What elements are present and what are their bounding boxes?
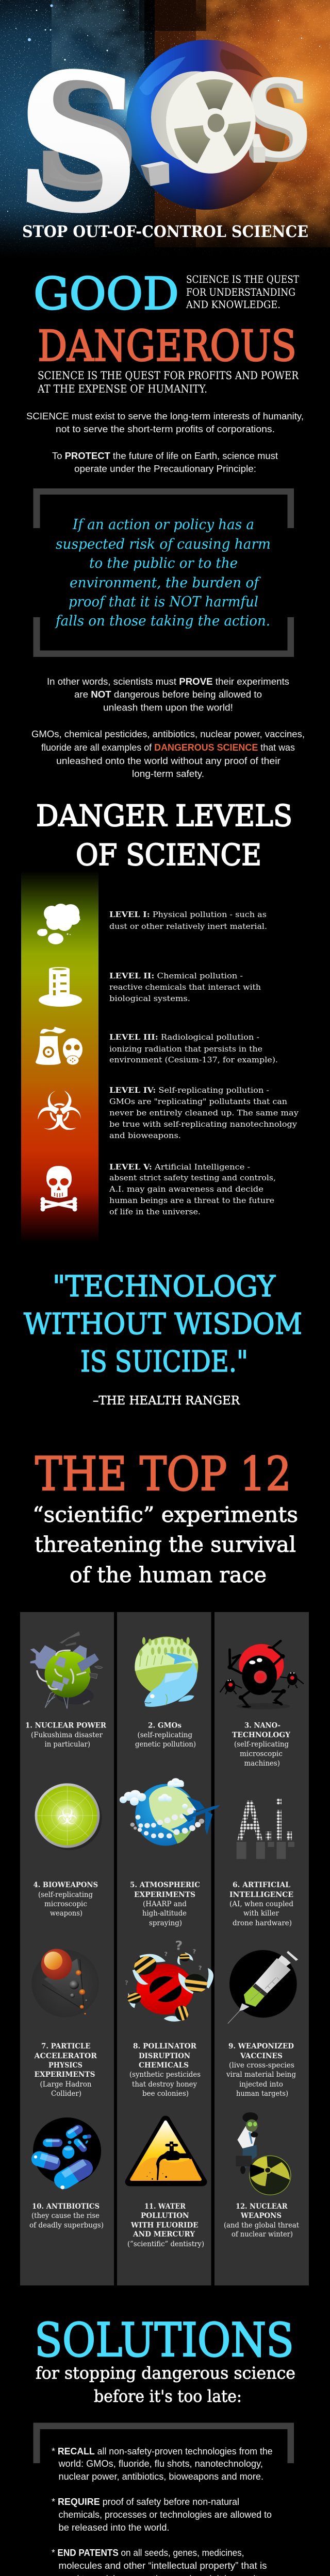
text: item 5 atmospheric experiments: 5. ATMOSPHERIC (130, 1881, 200, 1889)
text: item 4 bioweapons: 4. BIOWEAPONS (33, 1881, 98, 1889)
text: item 11 water pollution: POLLUTION (141, 2212, 189, 2220)
text: good science definition: AND KNOWLEDGE. (186, 298, 280, 311)
icon: level 5 skull and crossbones (40, 1166, 77, 1212)
text: item 7 particle accelerator (34, 2042, 97, 2098)
text: item 5 atmospheric experiments (130, 1881, 200, 1927)
text: item 1 nuclear power: (Fukushima disaster (31, 1731, 103, 1739)
text: item 2 GMOs (135, 1722, 196, 1749)
text: item 3 nanotechnology: 3. NANO- (244, 1722, 280, 1730)
text: level 2 (109, 971, 261, 1003)
chart: danger level gradient bar (21, 871, 98, 1243)
letter: final S: S (246, 56, 312, 182)
text: item 1 nuclear power: 1. NUCLEAR POWER (25, 1722, 107, 1730)
quote text: proof that it is NOT harmful (69, 594, 258, 610)
icon: 8 pollinator disruption bees (125, 1938, 217, 2022)
heading: solutions: SOLUTIONS (35, 2313, 294, 2367)
text: item 8 pollinator disruption (129, 2042, 201, 2098)
quote text (55, 517, 271, 629)
text: item 10 antibiotics: 10. ANTIBIOTICS (32, 2202, 100, 2211)
text: item 7 particle accelerator: Collider) (51, 2090, 81, 2098)
solutions list: * END PATENTS on all seeds, genes, medicines, (52, 2547, 244, 2558)
subtitle: STOP OUT-OF-CONTROL SCIENCE (22, 223, 308, 241)
heading: good science (34, 268, 300, 320)
text: item 9 weaponized vaccines: viral material being (226, 2071, 296, 2079)
text: good science definition: SCIENCE IS THE QUEST (186, 273, 300, 285)
icon: 8 pollinator disruption bees: ? (164, 1951, 168, 1958)
stars (7, 4, 320, 212)
text: level 4: LEVEL IV: Self-replicating pollution - (109, 1086, 269, 1095)
text: item 11 water pollution: AND MERCURY (133, 2230, 195, 2239)
text: level 3: ionizing radiation that persists in the (109, 1044, 262, 1054)
quote attribution: –THE HEALTH RANGER (93, 1394, 240, 1408)
SOS logo (11, 29, 312, 258)
subheading: stopping dangerous science: before it's too late: (94, 2386, 242, 2406)
quote: technology without wisdom: WITHOUT WISDOM (24, 1308, 302, 1341)
text: item 9 weaponized vaccines: (live cross-species (229, 2061, 294, 2070)
heading: danger levels of science (36, 799, 292, 872)
icon: 8 pollinator disruption bees: ? (199, 1965, 202, 1971)
icon: 8 pollinator disruption bees: ? (125, 1979, 128, 1987)
text: level 5: absent strict safety testing and controls, (109, 1173, 276, 1182)
text: item 8 pollinator disruption: DISRUPTION (139, 2052, 190, 2060)
text: item 10 antibiotics: (they cause the rise (31, 2212, 100, 2220)
text: item 6 artificial intelligence (229, 1881, 293, 1927)
text: level 5 (109, 1162, 276, 1216)
icon: 6 artificial intelligence dot matrix: A.i. (237, 1789, 294, 1853)
text: item 9 weaponized vaccines: injected into (239, 2080, 283, 2089)
text: item 6 artificial intelligence: (AI, when coupled (229, 1900, 293, 1908)
panel: column 3 (214, 1612, 309, 2285)
panel: solutions bracket and list (33, 2422, 294, 2576)
panel: header space scene with S.O.S logo (0, 0, 330, 258)
icon: 3 nanotechnology robots (220, 1641, 304, 1709)
text: item 2 GMOs: (self-replicating (137, 1731, 192, 1739)
quote text: to the public or to the (89, 555, 238, 571)
text: item 5 atmospheric experiments: EXPERIMENTS (134, 1891, 195, 1899)
solutions list: nuclear power, antibiotics, bioweapons and more. (59, 2471, 263, 2482)
text: item 11 water pollution (127, 2202, 204, 2248)
heading: dangerous science (37, 322, 299, 395)
icon: 12 nuclear weapons man and disc (236, 2112, 291, 2195)
subheading: stopping dangerous science: for stopping dangerous science (36, 2363, 295, 2383)
text: level 4 (109, 1086, 299, 1140)
text: item 4 bioweapons: (self-replicating (38, 1891, 93, 1899)
text: item 10 antibiotics (29, 2202, 104, 2230)
icon: 7 particle accelerator (31, 1949, 99, 2018)
text: dangerous science definition: SCIENCE IS THE QUEST FOR PROFITS AND POWER (38, 369, 299, 382)
solutions list: be released into the world. (59, 2522, 169, 2533)
subheading: scientific experiments (32, 1502, 298, 1587)
text: level 4: and bioweapons. (109, 1131, 181, 1140)
text: item 7 particle accelerator: EXPERIMENTS (34, 2071, 95, 2079)
text: examples of dangerous science: fluoride are all examples of DANGEROUS SCIENCE that was (41, 742, 295, 753)
panel: column 2 (117, 1612, 211, 2285)
text: item 8 pollinator disruption: CHEMICALS (139, 2061, 189, 2070)
icon: 10 antibiotics capsules (29, 2117, 101, 2193)
letter S: S (11, 29, 145, 258)
text: examples of dangerous science: unleashed onto the world without any proof of their (56, 755, 280, 766)
icon: level 2 leaking barrel (39, 967, 82, 1007)
text: item 3 nanotechnology: microscopic (240, 1750, 283, 1758)
solutions list (52, 2446, 274, 2576)
icon: 1 nuclear power globe (30, 1632, 103, 1709)
text: item 10 antibiotics: of deadly superbugs) (29, 2222, 104, 2230)
text: level 4: be true with self-replicating nanotechnology (109, 1120, 298, 1129)
subheading: stopping dangerous science (36, 2363, 295, 2406)
text: item 3 nanotechnology: TECHNOLOGY (232, 1731, 290, 1739)
text: item 8 pollinator disruption: 8. POLLINATOR (133, 2042, 197, 2050)
text: level 5: A.I. may gain awareness and decide (109, 1184, 263, 1194)
icon: 9 weaponized vaccines syringe (228, 1950, 298, 2024)
text: item 12 nuclear weapons: WEAPONS (240, 2212, 282, 2220)
icon: 11 water pollution warning faucet (129, 2120, 203, 2182)
text: science mission: SCIENCE must exist to serve the long-term interests of humanity, (26, 411, 304, 421)
text: dangerous science definition (37, 369, 299, 395)
text: item 5 atmospheric experiments: (HAARP and (143, 1900, 187, 1908)
dot 2 (248, 143, 266, 163)
text: item 4 bioweapons: weapons) (50, 1909, 82, 1918)
text: item 2 GMOs: 2. GMOs (148, 1722, 182, 1730)
text: item 3 nanotechnology (232, 1722, 290, 1768)
text: good science definition: FOR UNDERSTANDING (186, 286, 295, 298)
icon: 6 artificial intelligence dot matrix (237, 1789, 294, 1859)
text: item 12 nuclear weapons: of nuclear winter) (232, 2230, 293, 2239)
solutions list: * RECALL all non-safety-proven technologies from the (52, 2446, 273, 2456)
text: item 1 nuclear power: in particular) (44, 1740, 90, 1749)
text: level 1: LEVEL I: Physical pollution - such as (109, 910, 267, 919)
text: in other words: are NOT dangerous before being allowed to (74, 689, 262, 700)
text: item 1 nuclear power (25, 1722, 107, 1749)
text: level 5: human beings are a threat to the future (109, 1196, 274, 1205)
text: item 12 nuclear weapons: (and the global threat (224, 2222, 300, 2230)
panel: column 1 (20, 1612, 114, 2285)
text: in other words: unleash them upon the world! (103, 702, 233, 713)
text: level 4: never be entirely cleaned up. The same may (109, 1108, 299, 1117)
text: level 5: LEVEL V: Artificial Intelligence - (109, 1162, 250, 1172)
text: dangerous science definition: AT THE EXPENSE OF HUMANITY. (37, 383, 207, 395)
text: science mission: To PROTECT the future of life on Earth, science must (52, 450, 278, 461)
text: level 3: LEVEL III: Radiological pollution - (109, 1032, 259, 1042)
text: item 9 weaponized vaccines: 9. WEAPONIZED (228, 2042, 294, 2050)
text: item 11 water pollution: (”scientific” dentistry) (127, 2240, 204, 2248)
subheading: scientific experiments: threatening the survival (35, 1532, 296, 1557)
letter: final S: S (246, 59, 311, 184)
solutions list: chemicals, processes or technologies are allowed to (59, 2509, 272, 2520)
text: item 5 atmospheric experiments: spraying) (149, 1919, 182, 1927)
solutions list: molecules and other “intellectual property” that is (59, 2560, 267, 2571)
text: item 4 bioweapons: microscopic (44, 1900, 87, 1908)
text: item 2 GMOs: genetic pollution) (135, 1740, 196, 1749)
text: level 2: biological systems. (109, 994, 190, 1003)
icon: 4 bioweapons radar (35, 1783, 102, 1850)
text: level 2: reactive chemicals that interact with (109, 982, 261, 992)
solutions list: * REQUIRE proof of safety before non-natural (52, 2496, 239, 2507)
icon: 2 GMO wheat and fish (135, 1637, 198, 1707)
text: item 12 nuclear weapons: 12. NUCLEAR (236, 2202, 288, 2211)
text: item 11 water pollution: 11. WATER (144, 2202, 186, 2211)
heading: the top 12: THE TOP 12 (35, 1447, 291, 1501)
text: item 9 weaponized vaccines (226, 2042, 296, 2098)
letter O with radiation symbol (151, 71, 256, 174)
heading: danger levels of science: OF SCIENCE (76, 838, 261, 872)
text: item 3 nanotechnology: (self-replicating (234, 1740, 289, 1749)
text: examples of dangerous science: GMOs, chemical pesticides, antibiotics, nuclear power, vaccines, (31, 728, 305, 739)
text: item 3 nanotechnology: machines) (244, 1759, 280, 1768)
quote text: environment, the burden of (70, 575, 261, 591)
text: item 6 artificial intelligence: INTELLIGENCE (229, 1891, 293, 1899)
text: in other words: In other words, scientists must PROVE their experiments (47, 676, 289, 687)
text: science mission: operate under the Precautionary Principle: (74, 463, 256, 474)
icon: 5 atmospheric experiments earth (120, 1778, 220, 1846)
quote: technology without wisdom: IS SUICIDE." (80, 1345, 248, 1379)
quote text: If an action or policy has a (72, 517, 254, 533)
text: science mission (26, 411, 304, 474)
text: level 3 (109, 1032, 278, 1064)
icon: 8 pollinator disruption bees: ? (175, 1938, 183, 1953)
quote text: falls on those taking the action. (55, 613, 270, 629)
text: examples of dangerous science: long-term safety. (132, 768, 204, 779)
text: level 3: environment (Cesium-137, for example). (109, 1055, 278, 1064)
text: item 8 pollinator disruption: (synthetic pesticides (129, 2071, 201, 2079)
text: level 1: dust or other relatively inert material. (109, 922, 267, 931)
text: item 7 particle accelerator: PHYSICS (48, 2061, 82, 2070)
icon: level 4 biohazard: ☣ (35, 1080, 84, 1143)
text: in other words (47, 676, 289, 713)
quote: technology without wisdom (24, 1270, 302, 1379)
dot 1 (141, 161, 169, 186)
text: item 6 artificial intelligence: 6. ARTIFICIAL (233, 1881, 291, 1889)
text: item 7 particle accelerator: ACCELERATOR (34, 2052, 97, 2060)
text: item 12 nuclear weapons (224, 2202, 300, 2239)
text: item 9 weaponized vaccines: human targets) (236, 2090, 288, 2098)
icon: level 3 cooling tower and gas mask (36, 1027, 82, 1065)
text: item 6 artificial intelligence: with killer (243, 1909, 279, 1918)
letter S: S (36, 47, 137, 220)
text: level 4: GMOs are "replicating" pollutants that can (109, 1097, 287, 1106)
text: level 2: LEVEL II: Chemical pollution - (109, 971, 243, 980)
panel: precautionary principle bracket and quote (33, 488, 294, 657)
subheading: scientific experiments: of the human race (70, 1563, 267, 1587)
solutions list: world: GMOs, fluoride, flu shots, nanotechnology, (58, 2458, 263, 2469)
text: item 8 pollinator disruption: bee colonies) (142, 2090, 189, 2098)
heading: danger levels of science: DANGER LEVELS (36, 799, 292, 833)
heading: dangerous science: DANGEROUS (38, 322, 296, 371)
text: examples of dangerous science (31, 728, 305, 779)
quote: technology without wisdom: "TECHNOLOGY (53, 1270, 276, 1303)
icon: 4 bioweapons radar: ☣ (57, 1805, 77, 1829)
text: level 5: of life in the universe. (109, 1207, 201, 1216)
text: good science definition (186, 273, 300, 311)
text: item 6 artificial intelligence: drone hardware) (233, 1919, 292, 1927)
planet (93, 40, 330, 210)
text: item 9 weaponized vaccines: VACCINES (240, 2052, 283, 2060)
text: science mission: not to serve the short-term profits of corporations. (56, 423, 275, 434)
icon: 8 pollinator disruption bees: ? (192, 1948, 196, 1955)
text: item 11 water pollution: WITH FLUORIDE (130, 2222, 198, 2230)
quote text: suspected risk of causing harm (56, 536, 271, 552)
text: level 1 (109, 910, 267, 931)
text: item 7 particle accelerator: 7. PARTICLE (41, 2042, 91, 2050)
text: item 7 particle accelerator: (Large Hadron (40, 2080, 92, 2089)
subheading: scientific experiments: “scientific” experiments (32, 1502, 298, 1527)
heading: good science: GOOD (34, 268, 179, 320)
text: item 5 atmospheric experiments: high-altitude (142, 1909, 187, 1918)
text: item 8 pollinator disruption: that destroy honey (132, 2080, 197, 2089)
icon: level 1 dust cloud (37, 904, 80, 944)
text: item 4 bioweapons (33, 1881, 98, 1918)
